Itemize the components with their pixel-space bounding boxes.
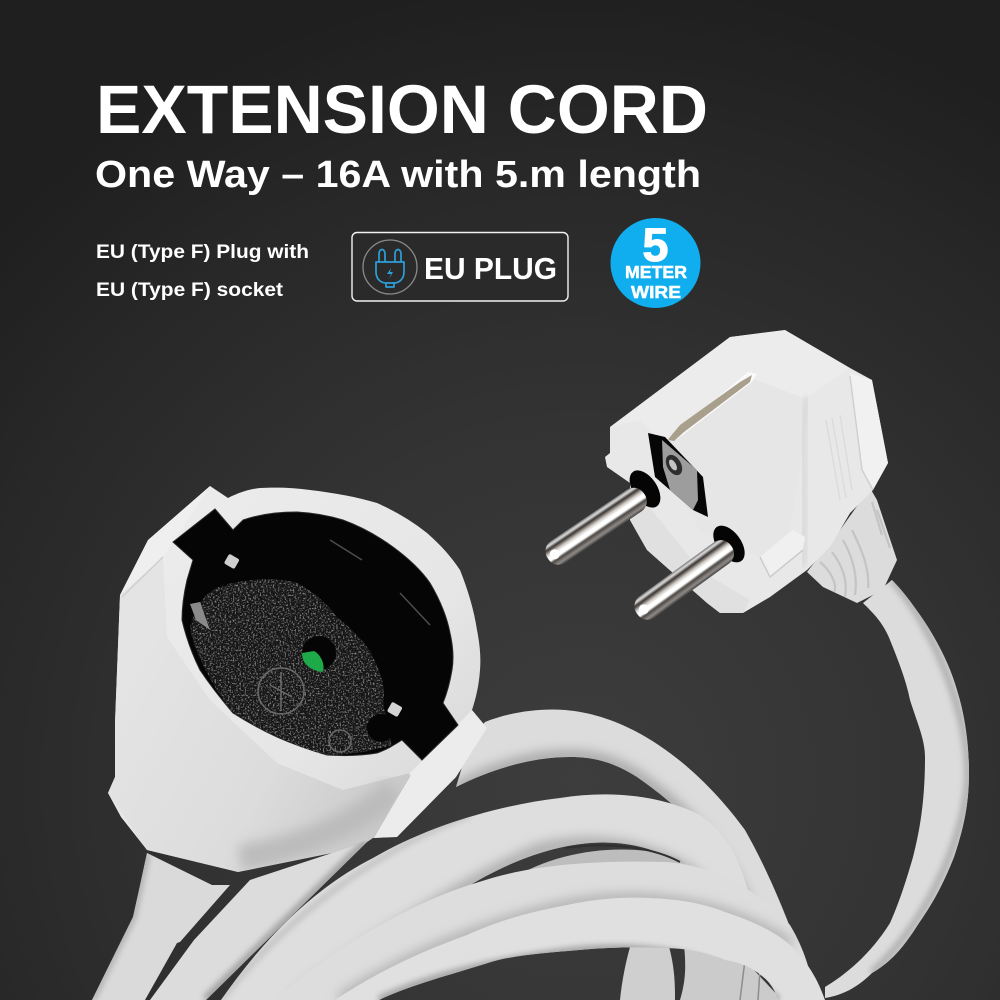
socket green indicator [302, 636, 336, 672]
plug body [605, 330, 888, 613]
socket cavity [173, 509, 458, 760]
badge: EU plug [352, 232, 568, 301]
plug strain relief [807, 488, 897, 603]
plug ground clip [648, 372, 757, 517]
badge: 5 meter wire: METER [625, 262, 687, 282]
description text: EU (Type F) Plug with [96, 241, 309, 263]
plug shading [610, 330, 888, 613]
coiled cable [221, 710, 825, 1000]
cable: rear coil strands [620, 940, 782, 1000]
description text: EU (Type F) socket [96, 279, 284, 301]
cable: front arc [335, 898, 825, 1000]
cable: top arc [456, 710, 795, 940]
cord: lower cable from socket [150, 838, 373, 1000]
icon: blue plug [376, 250, 404, 287]
socket contacts [190, 540, 430, 742]
description text [96, 241, 309, 301]
plug [541, 330, 897, 625]
socket textured floor [190, 579, 392, 755]
socket strain relief [92, 853, 230, 1000]
cable: gray strand behind arcs [510, 845, 700, 892]
badge: 5 meter wire [610, 218, 700, 308]
plug cable [825, 580, 969, 998]
socket body [108, 486, 487, 872]
socket [108, 486, 487, 872]
socket shading [108, 486, 487, 872]
badge: EU plug: EU PLUG [424, 251, 557, 286]
socket cords [92, 838, 373, 1000]
title: EXTENSION CORD [96, 71, 708, 148]
cable: second arc [221, 794, 752, 1000]
socket embossed logos [258, 668, 351, 752]
badge: 5 meter wire: 5 [642, 218, 669, 271]
plug pin bottom [630, 535, 739, 625]
cable: third arc [274, 862, 815, 1000]
subtitle: One Way – 16A with 5.m length [95, 154, 701, 196]
plug pin top [541, 483, 651, 569]
badge: 5 meter wire: WIRE [631, 282, 681, 302]
plug pin holes [623, 465, 751, 568]
